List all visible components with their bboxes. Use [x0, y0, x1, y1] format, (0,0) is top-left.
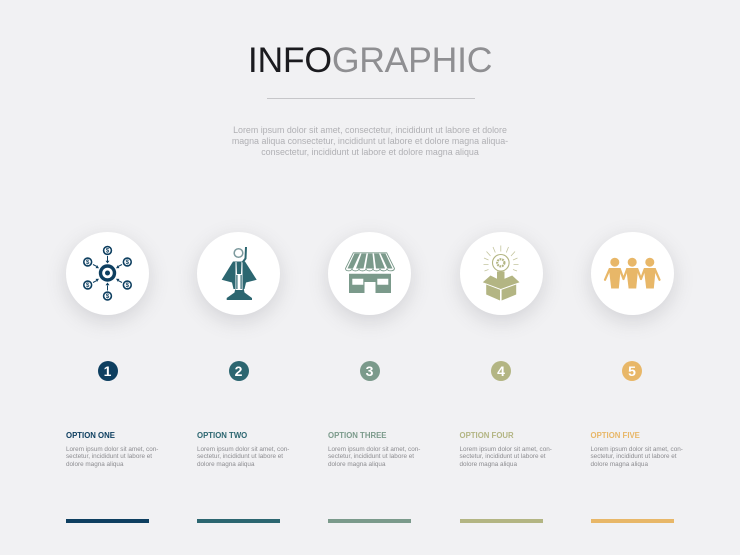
panel: icon circle 3 [328, 232, 411, 314]
icon: target with dollar coins: $ [126, 283, 130, 289]
number badge 2 [228, 361, 248, 381]
number badge 5: 5 [628, 363, 636, 379]
icon: target with dollar coins: $ [126, 260, 130, 266]
text: option one: sectetur, incididunt ut labore et [66, 453, 152, 460]
text: option one: dolore magna aliqua [66, 461, 124, 468]
number badge 4 [491, 361, 511, 381]
number badge 1: 1 [104, 363, 111, 379]
intro text [232, 125, 508, 157]
panel: icon circle 4 [460, 232, 542, 314]
text: option two [197, 446, 290, 468]
text: option five: Lorem ipsum dolor sit amet, con- [590, 446, 683, 452]
text: option three: Lorem ipsum dolor sit amet, con- [328, 446, 420, 452]
text: option four: dolore magna aliqua [460, 461, 517, 468]
text: option four: Lorem ipsum dolor sit amet, con- [460, 446, 552, 452]
divider [267, 98, 475, 99]
icon: target with dollar coins: $ [106, 294, 110, 300]
text: option three: dolore magna aliqua [328, 461, 386, 468]
intro text: Lorem ipsum dolor sit amet, consectetur, incididunt ut labore et dolore [233, 125, 507, 135]
icon: three people holding hands [604, 258, 661, 288]
text: option four: sectetur, incididunt ut labore et [460, 453, 546, 460]
number badge 2: 2 [235, 363, 242, 379]
intro text: magna aliqua consectetur, incididunt ut labore et dolore magna aliqua- [232, 136, 508, 146]
icon: light bulb rising from box [482, 246, 520, 300]
heading: option three: OPTION THREE [328, 430, 386, 440]
bar: option five [590, 519, 674, 522]
text: option two: sectetur, incididunt ut labore et [197, 453, 283, 460]
icon: storefront [345, 252, 395, 293]
text: option one [66, 446, 158, 468]
text: option three [328, 446, 420, 468]
bar: option four [460, 519, 542, 522]
text: option five [590, 446, 683, 468]
intro text: consectetur, incididunt ut labore et dolore magna aliqua [261, 147, 479, 157]
panel: icon circle 5 [590, 232, 674, 314]
bar: option one [66, 519, 149, 522]
heading: option five: OPTION FIVE [590, 430, 640, 440]
number badge 4: 4 [497, 363, 505, 379]
bar: option two [197, 519, 280, 522]
text: option two: dolore magna aliqua [197, 461, 254, 468]
bar: option three [328, 519, 411, 522]
heading: option one: OPTION ONE [66, 430, 115, 440]
panel: icon circle 1 [66, 232, 149, 314]
icon: target with dollar coins [83, 246, 132, 301]
text: option one: Lorem ipsum dolor sit amet, con- [66, 446, 158, 452]
panel: icon circle 2 [197, 232, 280, 314]
title: INFOGRAPHIC [248, 40, 492, 80]
text: option two: Lorem ipsum dolor sit amet, con- [197, 446, 289, 452]
text: option five: dolore magna aliqua [590, 461, 648, 468]
number badge 3: 3 [366, 363, 373, 379]
text: option three: sectetur, incididunt ut labore et [328, 453, 414, 460]
text: option five: sectetur, incididunt ut labore et [590, 453, 677, 460]
number badge 1 [98, 361, 118, 381]
text: option four [460, 446, 552, 468]
heading: option two: OPTION TWO [197, 430, 247, 440]
icon: target with dollar coins: $ [86, 283, 90, 289]
icon: caped hero on pedestal [222, 247, 257, 300]
number badge 5 [622, 361, 642, 381]
heading: option four: OPTION FOUR [460, 430, 514, 440]
icon: target with dollar coins: $ [106, 248, 110, 254]
icon: target with dollar coins: $ [86, 260, 90, 266]
number badge 3 [360, 361, 380, 381]
